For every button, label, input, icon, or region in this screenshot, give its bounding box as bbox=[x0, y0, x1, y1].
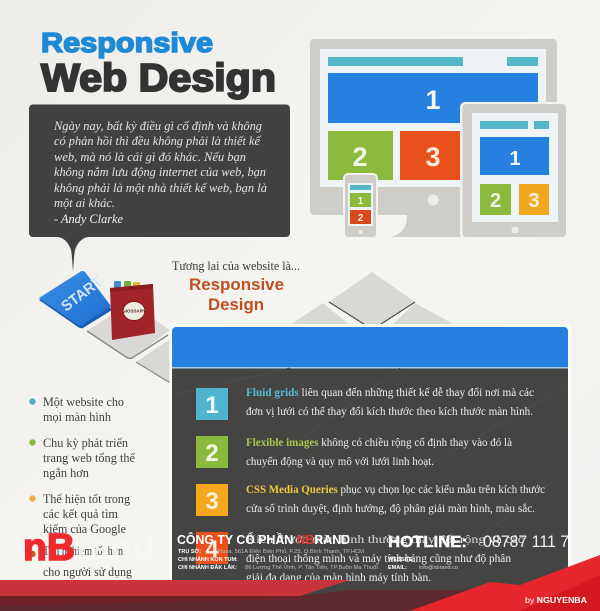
subheading: Responsive bbox=[189, 275, 284, 294]
start button: START bbox=[58, 273, 106, 315]
item 4: giải đa dạng của màn hình máy tính bàn. bbox=[246, 570, 431, 584]
quote text: không phải là một nhà thiết kế web, bạn là bbox=[54, 181, 267, 195]
tablet bbox=[460, 102, 568, 239]
bullet list: ngắn hơn bbox=[43, 465, 89, 480]
bottom red banner bbox=[0, 555, 600, 611]
item 1: 1 bbox=[205, 392, 219, 419]
watermark logo: nB bbox=[23, 527, 75, 569]
tablet: 1 bbox=[509, 148, 521, 170]
quote text bbox=[53, 119, 267, 226]
watermark logo bbox=[23, 527, 155, 569]
subheading bbox=[172, 259, 300, 314]
company info: CHI NHÁNH KON TUM: bbox=[178, 556, 238, 563]
bullet list bbox=[29, 394, 135, 579]
quote text: một ai khác. bbox=[54, 196, 115, 210]
quote text: Ngày nay, bất kỳ điều gì cố định và không bbox=[53, 119, 262, 133]
item 1 bbox=[196, 385, 534, 420]
hotline bbox=[388, 532, 578, 571]
item 4: 4 bbox=[205, 536, 219, 563]
subheading: Design bbox=[208, 295, 264, 314]
tablet: 3 bbox=[528, 190, 540, 212]
company info: Plaza, 561A Điện Biên Phủ, P.25, Q.Bình Thạnh, TP.HCM bbox=[217, 548, 364, 555]
item 2: Flexible images không có chiều rộng cố định thay vào đó là bbox=[246, 435, 513, 449]
hotline: EMAIL: bbox=[388, 565, 407, 571]
title: Responsive bbox=[41, 27, 213, 58]
hotline: info@nbrand.co bbox=[419, 565, 458, 571]
quote text: không nắm lưu động internet của web, bạn bbox=[54, 165, 266, 179]
byline: by NGUYENBA bbox=[525, 596, 587, 605]
hotline: WEBSITE: bbox=[388, 557, 415, 563]
icon: book bbox=[110, 281, 155, 340]
bullet list: Chu kỳ phát triển bbox=[43, 435, 128, 450]
watermark logo: rand bbox=[76, 527, 155, 568]
tablet: 2 bbox=[490, 190, 501, 212]
hotline: HOTLINE: bbox=[388, 534, 467, 551]
item 2: chuyển động và quy mô với lưới linh hoạt. bbox=[246, 454, 434, 468]
bullet list: trang web tổng thể bbox=[43, 450, 135, 465]
bullet list: Trải nghiệm tốt hơn bbox=[43, 543, 123, 558]
phone: 2 bbox=[358, 213, 364, 224]
bullet list: Một website cho bbox=[43, 394, 124, 409]
bullet list: cho người sử dụng bbox=[43, 564, 132, 579]
quote text: - Andy Clarke bbox=[54, 212, 123, 226]
item 1: Fluid grids liên quan đến những thiết kế dễ thay đổi nơi mà các bbox=[246, 385, 534, 399]
bullet list: Thể hiện tốt trong bbox=[43, 491, 130, 506]
company info bbox=[177, 532, 378, 571]
company info: CHI NHÁNH ĐẮK LẮK: bbox=[178, 563, 237, 571]
start button bbox=[39, 271, 112, 328]
bullet list: kiếm của Google bbox=[43, 521, 126, 536]
phone: 1 bbox=[358, 196, 364, 207]
bullet list: các kết quả tìm bbox=[43, 506, 118, 521]
item 2 bbox=[196, 435, 513, 468]
item 3 bbox=[196, 482, 545, 516]
item 4: điện thoại thông minh và máy tính bảng cũng như độ phân bbox=[246, 551, 511, 565]
devices illustration bbox=[310, 39, 568, 239]
item 3: cửa sổ trình duyệt, định hướng, độ phân giải màn hình, màu sắc. bbox=[246, 501, 535, 515]
stepping tiles path bbox=[87, 272, 455, 384]
hotline: 08787 111 77 bbox=[483, 532, 578, 551]
subheading: Tương lai của website là... bbox=[172, 259, 300, 273]
panel: techniques bbox=[170, 324, 571, 611]
quote text: web, mà nó là cái gì đó khác. Nếu bạn bbox=[54, 150, 246, 164]
icon: book: GIOSSARY bbox=[122, 308, 146, 314]
company info: CÔNG TY CỔ PHẦN NBRAND bbox=[177, 532, 350, 547]
phone bbox=[343, 173, 378, 239]
item 2: 2 bbox=[205, 440, 219, 467]
title bbox=[41, 27, 276, 100]
monitor bbox=[310, 39, 557, 237]
quote callout bbox=[29, 104, 290, 272]
item 4: Kích thước màn hình thường thay đổi rộng và các bbox=[246, 532, 524, 546]
company info: 86 Lương Thế Vinh, P. Tân Tiến, TP.Buôn Ma Thuột bbox=[245, 565, 378, 571]
monitor: 1 bbox=[425, 85, 441, 115]
title: Web Design bbox=[41, 57, 276, 100]
monitor: 3 bbox=[425, 142, 441, 172]
item 1: đơn vị lưới có thể thay đổi kích thước theo kích thước màn hình. bbox=[246, 404, 533, 418]
item 3: CSS Media Queries phục vụ chọn lọc các kiểu mẫu trên kích thước bbox=[246, 482, 545, 496]
monitor: 2 bbox=[352, 142, 368, 172]
item 4 bbox=[196, 532, 524, 584]
company info: TRỤ SỞ: bbox=[178, 548, 201, 555]
bullet list: mọi màn hình bbox=[43, 409, 111, 424]
quote text: có phản hồi thì đều không phải là thiết kế bbox=[54, 134, 261, 148]
item 3: 3 bbox=[205, 488, 219, 515]
